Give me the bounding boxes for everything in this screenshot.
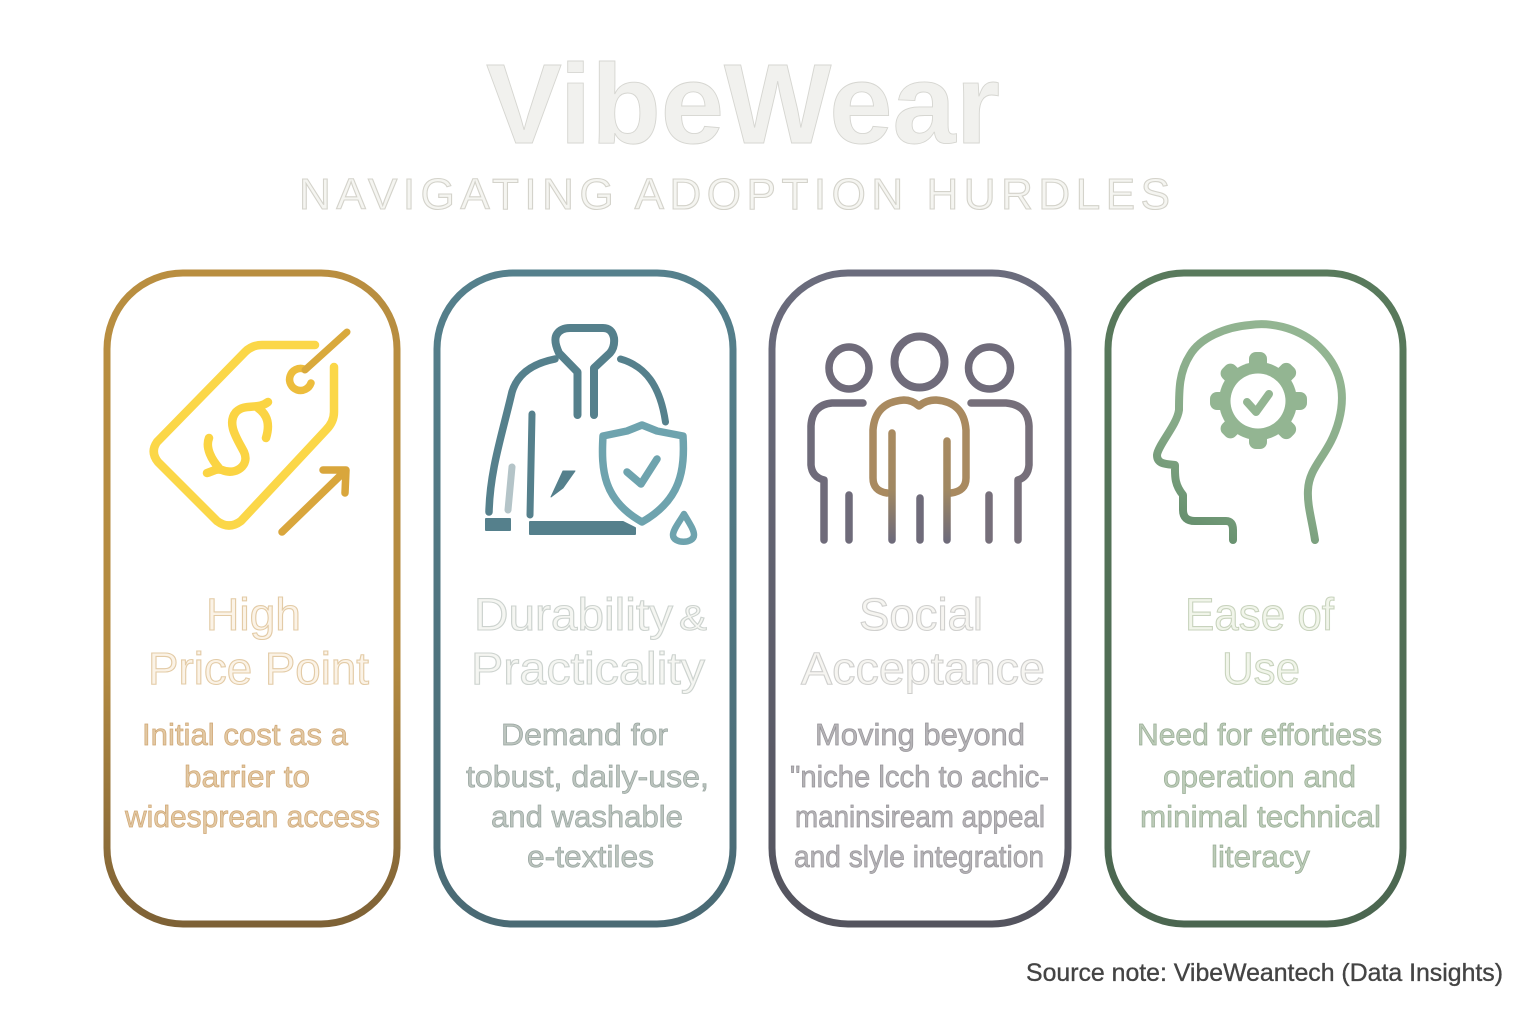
- description: Moving beyond: [815, 717, 1025, 752]
- description: operation and: [1163, 759, 1356, 794]
- heading: &: [679, 599, 707, 638]
- heading: Use: [1222, 643, 1300, 694]
- description: widesprean access: [124, 799, 380, 834]
- description: [466, 717, 709, 874]
- description: literacy: [1211, 839, 1310, 874]
- description: barrier to: [184, 759, 310, 794]
- description: Need for effortiess: [1137, 717, 1382, 752]
- description: [790, 717, 1049, 874]
- description: and washable: [491, 799, 683, 834]
- description: tobust, daily-use,: [466, 759, 709, 794]
- card border: [1108, 273, 1403, 924]
- icon: hoodie with shield and water drop: [486, 328, 694, 542]
- title: VibeWear: [486, 41, 1000, 167]
- description: Initial cost as a: [142, 717, 349, 752]
- subtitle: NAVIGATING ADOPTION HURDLES: [299, 170, 1170, 219]
- description: maninsiream appeal: [795, 799, 1045, 834]
- description: and slyle integration: [794, 839, 1044, 874]
- card border: [437, 273, 733, 924]
- icon: price tag with rising arrow: [154, 332, 347, 532]
- icon: head profile with gear: [1157, 324, 1342, 540]
- card border: [772, 273, 1068, 924]
- panel: ease of use: [1108, 273, 1403, 924]
- heading: [801, 589, 1045, 694]
- description: "niche lcch to achic-: [790, 759, 1049, 794]
- description: e-textiles: [527, 839, 654, 874]
- heading: Ease of: [1185, 589, 1334, 640]
- panel: high price point: [107, 273, 397, 924]
- heading: Practicality: [471, 643, 706, 694]
- panel: durability and practicality: [437, 273, 733, 924]
- heading: Durability: [474, 589, 674, 640]
- description: Demand for: [501, 717, 668, 752]
- source note: Source note: VibeWeantech (Data Insights): [1026, 959, 1503, 987]
- description: minimal technical: [1140, 799, 1381, 834]
- heading: Price Point: [148, 643, 369, 694]
- description: [1137, 717, 1382, 874]
- icon: group of three people: [811, 336, 1029, 540]
- description: [124, 717, 380, 834]
- heading: [471, 589, 707, 694]
- heading: [148, 589, 369, 694]
- heading: High: [206, 589, 301, 640]
- panel: social acceptance: [772, 273, 1068, 924]
- heading: Acceptance: [801, 643, 1045, 694]
- heading: [1185, 589, 1334, 694]
- card border: [107, 273, 397, 924]
- heading: Social: [859, 589, 983, 640]
